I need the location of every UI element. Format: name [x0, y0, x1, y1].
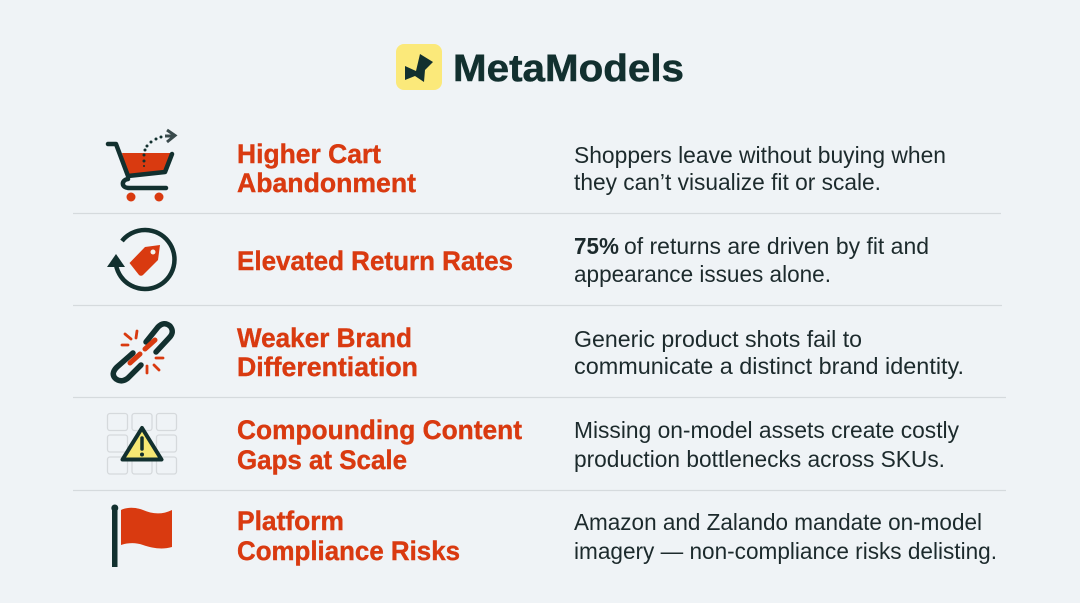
heading: Abandonment [237, 168, 416, 198]
description: Generic product shots fail to [574, 326, 862, 352]
description: Shoppers leave without buying when [574, 142, 946, 168]
heading: Higher Cart [237, 139, 381, 169]
logo [396, 44, 684, 90]
description: imagery — non-compliance risks delisting. [574, 538, 997, 564]
heading: Compliance Risks [237, 536, 460, 566]
description: of returns are driven by fit and [624, 233, 929, 259]
panel: platform compliance risks [111, 504, 997, 567]
panel: elevated return rates [107, 230, 929, 289]
icon: warning over grid [108, 414, 176, 474]
icon: logo mark [396, 44, 442, 90]
heading: Gaps at Scale [237, 445, 407, 475]
heading: Platform [237, 506, 344, 536]
description: communicate a distinct brand identity. [574, 353, 964, 379]
panel: weaker brand differentiation [113, 323, 964, 382]
icon: shopping cart [108, 130, 175, 202]
panel: higher cart abandonment [108, 130, 946, 202]
description: production bottlenecks across SKUs. [574, 446, 945, 472]
icon: flag [111, 504, 172, 567]
heading: Weaker Brand [237, 323, 412, 353]
description: Amazon and Zalando mandate on-model [574, 509, 982, 535]
description: 75% [574, 233, 619, 259]
description: they can’t visualize fit or scale. [574, 169, 881, 195]
panel: compounding content gaps [108, 414, 959, 475]
heading: Compounding Content [237, 415, 522, 445]
heading: Differentiation [237, 352, 418, 382]
heading: Elevated Return Rates [237, 246, 513, 276]
description: appearance issues alone. [574, 261, 831, 287]
icon: broken chain [113, 324, 172, 381]
brand name: MetaModels [453, 48, 684, 90]
icon: return tag [107, 230, 174, 289]
description: Missing on-model assets create costly [574, 417, 959, 443]
